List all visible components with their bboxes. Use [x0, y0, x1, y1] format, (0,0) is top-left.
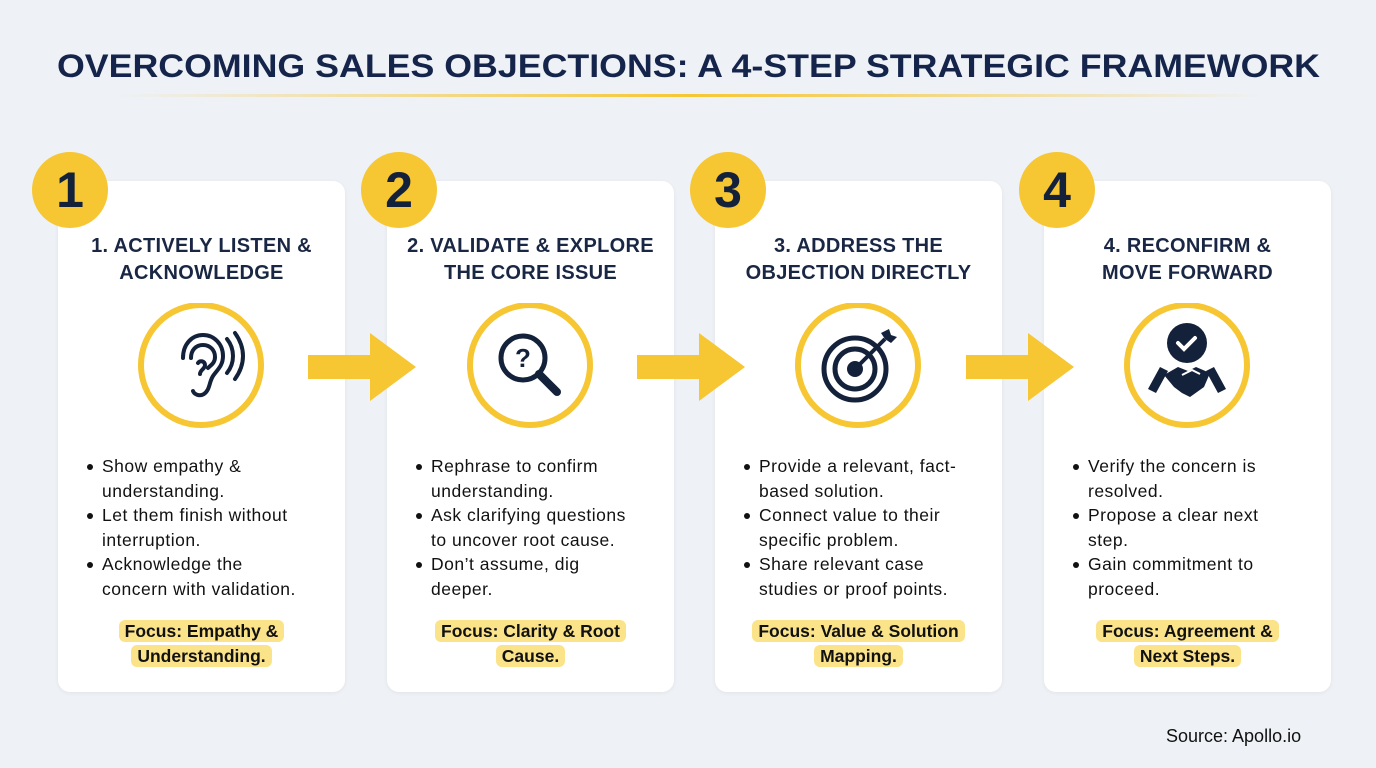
icon: ear — [138, 303, 264, 428]
heading: step 1: ACKNOWLEDGE — [119, 262, 284, 284]
badge 1: 1 — [56, 162, 84, 218]
title: OVERCOMING SALES OBJECTIONS: A 4-STEP STRATEGIC FRAMEWORK — [57, 48, 1320, 84]
title — [57, 48, 1320, 97]
bullets: step 3: specific problem. — [759, 530, 899, 550]
bullets: step 3: based solution. — [759, 480, 884, 500]
focus: step 2: Cause. — [502, 646, 559, 666]
arrow 2 — [637, 333, 745, 401]
heading: step 2 — [407, 235, 654, 284]
badge 2 — [361, 152, 437, 228]
bullets: step 1: understanding. — [102, 480, 225, 500]
heading: step 4: MOVE FORWARD — [1102, 262, 1273, 284]
heading: step 3 — [746, 235, 971, 284]
focus: step 2 — [435, 620, 626, 667]
panel: step 3 — [715, 181, 1002, 692]
heading: step 3: OBJECTION DIRECTLY — [746, 262, 971, 284]
bullets: step 4: resolved. — [1088, 480, 1164, 500]
bullets: step 3: Share relevant case — [759, 554, 924, 574]
bullets: step 2: understanding. — [431, 480, 554, 500]
focus: step 3: Mapping. — [820, 646, 897, 666]
heading: step 1 — [91, 235, 312, 284]
focus: step 1 — [119, 620, 284, 667]
badge 4 — [1019, 152, 1095, 228]
bullets: step 1: concern with validation. — [102, 578, 296, 598]
badge 4: 4 — [1043, 162, 1071, 218]
focus: step 4 — [1096, 620, 1279, 667]
bullets: step 4: Verify the concern is — [1088, 456, 1256, 476]
heading: step 4: 4. RECONFIRM & — [1104, 235, 1271, 257]
bullets: step 2 — [416, 456, 626, 598]
bullets: step 1: Let them finish without — [102, 505, 288, 525]
heading: step 4 — [1102, 235, 1273, 284]
focus: step 1: Focus: Empathy & — [125, 621, 278, 641]
arrow 1 — [308, 333, 416, 401]
panel: step 1 — [58, 181, 345, 692]
bullets: step 3 — [744, 456, 956, 598]
focus: step 3 — [752, 620, 965, 667]
bullets: step 4: step. — [1088, 530, 1128, 550]
bullets: step 2: deeper. — [431, 578, 493, 598]
bullets: step 4: Gain commitment to — [1088, 554, 1254, 574]
bullets: step 4 — [1073, 456, 1259, 598]
badge 3: 3 — [714, 162, 742, 218]
arrow 3 — [966, 333, 1074, 401]
bullets: step 2: to uncover root cause. — [431, 530, 615, 550]
icon: handshake check — [1124, 303, 1250, 428]
badge 1 — [32, 152, 108, 228]
heading: step 2: THE CORE ISSUE — [444, 262, 617, 284]
bullets: step 1: Acknowledge the — [102, 554, 243, 574]
icon: magnifier question — [467, 303, 593, 428]
heading: step 2: 2. VALIDATE & EXPLORE — [407, 235, 654, 257]
bullets: step 2: Don’t assume, dig — [431, 554, 580, 574]
bullets: step 4: proceed. — [1088, 578, 1160, 598]
icon: target — [795, 303, 921, 428]
bullets: step 3: Provide a relevant, fact- — [759, 456, 956, 476]
bullets: step 2: Ask clarifying questions — [431, 505, 626, 525]
focus: step 1: Understanding. — [137, 646, 266, 666]
panel: step 2 — [387, 181, 674, 692]
focus: step 4: Focus: Agreement & — [1102, 621, 1273, 641]
bullets: step 3: Connect value to their — [759, 505, 940, 525]
heading: step 3: 3. ADDRESS THE — [774, 235, 943, 257]
focus: step 4: Next Steps. — [1140, 646, 1235, 666]
bullets: step 1 — [87, 456, 296, 598]
badge 2: 2 — [385, 162, 413, 218]
focus: step 3: Focus: Value & Solution — [758, 621, 959, 641]
source: Source: Apollo.io — [1166, 726, 1301, 746]
bullets: step 1: interruption. — [102, 530, 201, 550]
icon: magnifier question: ? — [515, 343, 531, 373]
focus: step 2: Focus: Clarity & Root — [441, 621, 620, 641]
heading: step 1: 1. ACTIVELY LISTEN & — [91, 235, 312, 257]
bullets: step 1: Show empathy & — [102, 456, 241, 476]
badge 3 — [690, 152, 766, 228]
bullets: step 2: Rephrase to confirm — [431, 456, 598, 476]
panel: step 4 — [1044, 181, 1331, 692]
bullets: step 3: studies or proof points. — [759, 578, 948, 598]
bullets: step 4: Propose a clear next — [1088, 505, 1259, 525]
